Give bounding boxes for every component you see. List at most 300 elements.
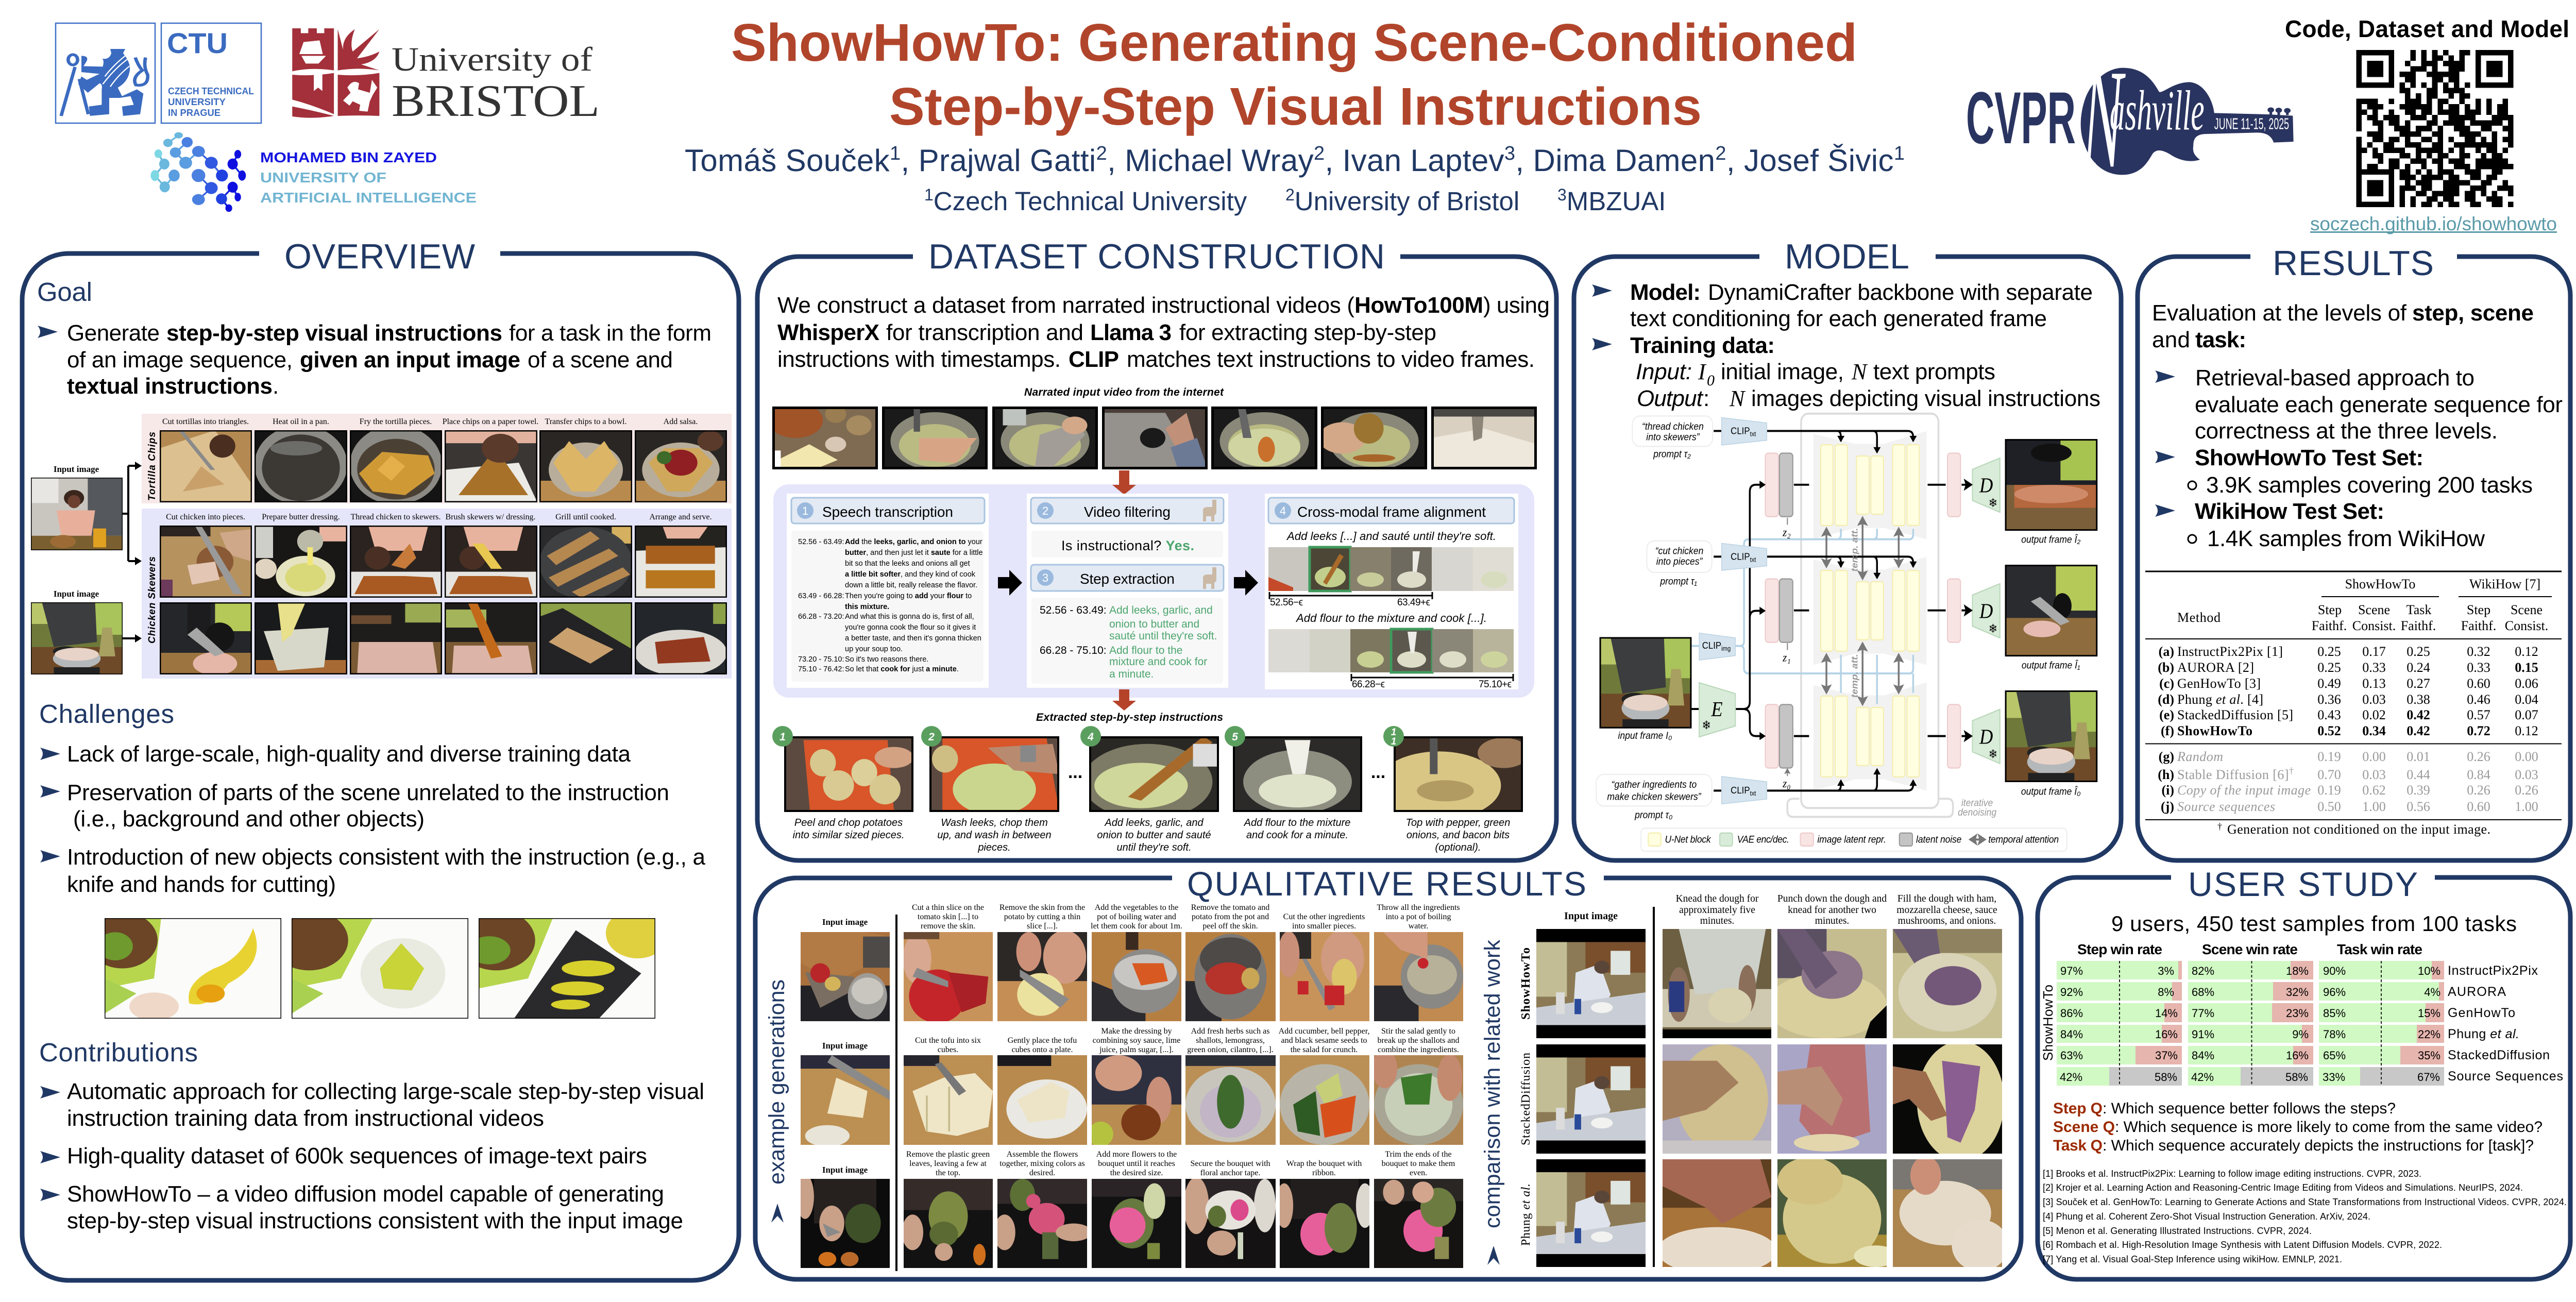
captions: example generations: Add the vegetables to the <box>1095 903 1178 912</box>
bar values: 84% <box>2192 1049 2214 1062</box>
table: results: (j) <box>2161 799 2174 814</box>
photo row: tomato and potato <box>801 931 1463 1023</box>
text block: contributions <box>40 1079 704 1233</box>
table: results: WikiHow [7] <box>2469 577 2540 591</box>
captions: example generations: leaves, leaving a few at <box>909 1159 987 1168</box>
captions: example generations <box>906 903 1460 1177</box>
captions: example generations: green onion, cilantro, [...]. <box>1187 1045 1274 1054</box>
step captions: pieces. <box>977 842 1011 853</box>
logo: Czech Technical University: UNIVERSITY <box>168 97 226 107</box>
photo row: flower bouquet <box>796 1174 1463 1268</box>
text block: results description: Retrieval-based approach to <box>2195 365 2475 391</box>
method labels: StackedDiffusion <box>1519 1053 1533 1145</box>
table: results: 0.49 <box>2317 676 2341 691</box>
step captions: onions, and bacon bits <box>1406 830 1510 841</box>
references: [3] Souček et al. GenHowTo: Learning to Generate Actions and State Transformations from Instructional Videos. CVPR, 2024. <box>2043 1197 2567 1207</box>
text block: results description: Evaluation at the levels of <box>2152 300 2407 326</box>
clip text encoders <box>1722 418 1767 804</box>
table: results: † <box>2217 821 2222 832</box>
table: results: 0.42 <box>2406 723 2430 738</box>
bar values: 92% <box>2060 986 2083 999</box>
text block: challenges: Lack of large-scale, high-quality and diverse training data <box>67 741 631 767</box>
table: results: 0.26 <box>2467 783 2490 798</box>
frame strip 1 <box>1268 547 1514 591</box>
step captions: into similar sized pieces. <box>793 830 904 841</box>
caption: narrated input video: Narrated input video from the internet <box>1024 386 1224 398</box>
text block: results description: 3.9K samples covering 200 tasks <box>2206 472 2533 498</box>
table: results: 0.12 <box>2515 644 2538 659</box>
table: results: 0.60 <box>2467 799 2490 814</box>
text block: dataset intro: ) using <box>1483 293 1550 318</box>
iterative denoising label <box>1958 797 1997 818</box>
gray temporal attention arrows <box>1826 518 1899 704</box>
u-net row 2: ❄ <box>1989 496 1997 510</box>
steps 2 and 3: filtering and extraction: Add leeks, garlic, and <box>1109 604 1213 616</box>
bar values: 96% <box>2323 986 2346 999</box>
panel: results <box>2138 244 2570 860</box>
authors: 2 <box>1314 143 1325 164</box>
step 1: speech transcription: down a little bit, really release the flavor. <box>845 581 977 589</box>
table: results: 0.43 <box>2317 707 2341 722</box>
latent noise labels: z₀ <box>1782 776 1791 790</box>
input image labels: Input image <box>822 1165 868 1175</box>
clip image encoder: img <box>1721 645 1731 652</box>
affiliations: MBZUAI <box>1567 187 1666 216</box>
captions: example generations: bouquet until it reaches <box>1098 1159 1175 1168</box>
steps 2 and 3: filtering and extraction: 3 <box>1042 571 1048 584</box>
chart titles: Scene win rate <box>2202 941 2298 957</box>
table: results: ShowHowTo <box>2177 723 2252 738</box>
text block: goal: Generate <box>67 320 160 346</box>
prompts: prompt τ₁ <box>1659 576 1697 587</box>
step 1: speech transcription: 63.49 - 66.28: <box>798 592 844 600</box>
text block: contributions: High-quality dataset of 600k sequences of image-text pairs <box>67 1143 647 1169</box>
bar values: 78% <box>2323 1028 2346 1041</box>
table: results: 0.70 <box>2317 767 2341 782</box>
legend: VAE enc/dec. <box>1737 834 1789 845</box>
arrow: down to pipeline <box>1112 470 1136 495</box>
video frames strip <box>768 403 1537 470</box>
text block: model description: text conditioning for each generated frame <box>1630 306 2047 331</box>
panel: model <box>1574 237 2121 860</box>
table: results: AURORA [2] <box>2177 660 2254 675</box>
bar values: 68% <box>2192 986 2214 999</box>
captions: example generations: the top. <box>936 1169 960 1177</box>
timeline 1 <box>1269 592 1432 608</box>
captions: example generations: remove the skin. <box>921 922 975 931</box>
logo: CVPR Nashville: CVPR <box>1966 77 2076 159</box>
subheading: goal: Goal <box>37 277 92 307</box>
captions: comparison: approximately five <box>1679 905 1755 916</box>
u-net row 0: ❄ <box>1989 748 1997 761</box>
step captions: Wash leeks, chop them <box>941 817 1048 828</box>
panel: overview <box>22 237 739 1280</box>
text block: goal: . <box>273 374 279 399</box>
step captions: Top with pepper, green <box>1406 817 1510 828</box>
table: results: 0.38 <box>2406 692 2430 707</box>
step 1: speech transcription <box>787 494 989 688</box>
captions: example generations: Secure the bouquet with <box>1190 1159 1270 1168</box>
bar values: 10% <box>2418 965 2441 977</box>
title: ShowHowTo: Generating Scene-Conditioned <box>731 13 1857 72</box>
icon: CTU lion <box>61 49 148 116</box>
table: results: Random <box>2177 749 2223 764</box>
captions: example generations: Remove the tomato and <box>1191 903 1269 912</box>
clip text encoders: CLIP <box>1731 426 1750 436</box>
step captions: up, and wash in between <box>937 830 1052 841</box>
text block: dataset intro: instructions with timestamps. <box>777 347 1061 372</box>
table: results: 0.27 <box>2406 676 2430 691</box>
logo: MBZUAI: ARTIFICIAL INTELLIGENCE <box>260 190 477 206</box>
step 1: speech transcription: you're gonna cook the flour so it gives it <box>845 623 976 632</box>
photo row: chicken skewers 1 <box>160 526 727 599</box>
step captions: Add flour to the mixture <box>1244 817 1350 828</box>
bar values: 22% <box>2418 1028 2441 1041</box>
text block: questions: Scene Q <box>2053 1119 2115 1136</box>
captions: example generations: let them cook for about 1m. <box>1091 922 1182 931</box>
text block: model description <box>1592 280 2100 411</box>
captions: comparison: Input image <box>1564 910 1618 922</box>
figure: overview example sequences: Tortilla Chips <box>147 432 158 501</box>
text block: dataset intro: Llama 3 <box>1090 320 1172 345</box>
table: results: InstructPix2Pix [1] <box>2177 644 2283 659</box>
captions: example generations: combine the ingredients. <box>1378 1045 1459 1054</box>
captions: example generations: even. <box>1410 1169 1427 1177</box>
table: results: 0.72 <box>2467 723 2490 738</box>
figure: overview example sequences: Input image <box>54 589 99 599</box>
table: results: Faithf. <box>2312 618 2347 633</box>
figure: overview example sequences: Thread chicken to skewers. <box>350 513 441 521</box>
side label: comparison with related work: comparison with related work <box>1480 940 1505 1228</box>
step 1: speech transcription: butter, and then just let it saute for a little <box>845 549 983 557</box>
step 4: cross-modal frame alignment: Add leeks [...] and sauté until they're soft. <box>1286 530 1496 543</box>
prompts: make chicken skewers” <box>1607 791 1701 802</box>
steps 2 and 3: filtering and extraction: 52.56 - 63.49: <box>1040 604 1107 616</box>
text block: model description: Input: <box>1636 359 1692 384</box>
heading: qualitative results: QUALITATIVE RESULTS <box>1187 865 1586 903</box>
affiliations: 2 <box>1285 185 1295 204</box>
authors: 1 <box>890 143 901 164</box>
text block: results description: task: <box>2195 327 2246 352</box>
table: results: 0.03 <box>2362 692 2386 707</box>
temporal attention labels: temp. att. <box>1849 654 1859 698</box>
clip text encoders: txt <box>1750 556 1756 564</box>
table: results: 0.03 <box>2515 767 2538 782</box>
timeline 2: 75.10+ϵ <box>1479 679 1512 690</box>
table: results: 0.19 <box>2317 749 2341 764</box>
input image labels: Input image <box>822 917 868 927</box>
icon: guitar: ashville <box>2110 79 2205 142</box>
text block: dataset intro: HowTo100M <box>1354 293 1483 318</box>
text block: model description: N <box>1729 386 1746 411</box>
table: results: 1.00 <box>2515 799 2538 814</box>
heading: dataset construction: DATASET CONSTRUCTION <box>928 237 1385 276</box>
table: results: 0.06 <box>2515 676 2538 691</box>
diagram: model architecture <box>1596 414 2097 851</box>
table: results: (f) <box>2161 723 2174 738</box>
subheading: contributions: Contributions <box>39 1038 198 1067</box>
authors: , Dima Damen <box>1515 143 1715 178</box>
references <box>2043 1169 2567 1264</box>
captions: example generations: together, mixing colors as <box>999 1159 1085 1168</box>
text block: model description: DynamiCrafter backbone with separate <box>1708 280 2093 305</box>
table: results: 0.25 <box>2317 644 2341 659</box>
text block: goal: textual instructions <box>67 374 273 399</box>
text block: questions: Task Q <box>2053 1137 2103 1154</box>
figure: overview example sequences: Add salsa. <box>664 417 698 426</box>
logo: MBZUAI: MOHAMED BIN ZAYED <box>260 149 437 165</box>
prompts: into skewers” <box>1646 431 1700 443</box>
clip text encoders: txt <box>1750 789 1756 797</box>
steps 2 and 3: filtering and extraction: sauté until they're soft. <box>1109 630 1217 642</box>
chart: win rates <box>2040 941 2563 1086</box>
timeline 2 <box>1351 674 1513 690</box>
heading: overview: OVERVIEW <box>284 237 475 276</box>
table: results: 0.25 <box>2317 660 2341 675</box>
legend: latent noise <box>1916 834 1961 845</box>
table: results: (a) <box>2159 644 2174 659</box>
legend: U-Net block <box>1665 834 1711 845</box>
photos: ShowHowTo row <box>1663 929 2002 1038</box>
table: results: 0.84 <box>2467 767 2490 782</box>
text block: results description: and <box>2152 327 2190 352</box>
clip text encoders: CLIP <box>1731 551 1750 562</box>
text block: challenges <box>40 741 706 897</box>
method names <box>2448 963 2563 1084</box>
logo: University of Bristol: BRISTOL <box>392 76 600 126</box>
captions: example generations: Add more flowers to the <box>1096 1150 1177 1159</box>
table: results: 0.07 <box>2515 707 2538 722</box>
bar values: 82% <box>2192 965 2214 977</box>
output frames <box>2005 439 2097 782</box>
text block: results description: WikiHow Test Set: <box>2195 499 2384 524</box>
latent noise labels <box>1782 518 1791 790</box>
figure: overview example sequences <box>31 414 732 679</box>
icon: MBZUAI molecule <box>150 132 246 212</box>
bar values <box>2060 965 2441 1084</box>
captions: example generations: potato by cutting a thin <box>1004 912 1080 921</box>
legend <box>1641 828 2067 851</box>
step 4: cross-modal frame alignment <box>1265 494 1518 690</box>
steps 2 and 3: filtering and extraction: 2 <box>1042 504 1048 517</box>
bar values: 33% <box>2323 1071 2345 1084</box>
steps 2 and 3: filtering and extraction: Add flour to the <box>1109 645 1182 656</box>
clip text encoders: txt <box>1750 430 1756 438</box>
bar values: 8% <box>2158 986 2174 999</box>
prompts: “gather ingredients to <box>1612 779 1697 790</box>
label: input frame: input frame I₀ <box>1618 730 1672 741</box>
chart titles: Step win rate <box>2077 941 2162 957</box>
table: results: 0.42 <box>2406 707 2430 722</box>
icon: Bristol shield <box>292 28 379 118</box>
table: results: Step <box>2318 602 2342 617</box>
authors: , Josef Šivic <box>1726 143 1893 178</box>
logo: University of Bristol: University of <box>392 41 592 78</box>
bar values: 85% <box>2323 1007 2346 1020</box>
table: results: 0.12 <box>2515 723 2538 738</box>
authors: , Ivan Laptev <box>1325 143 1504 178</box>
text block: model description: Model: <box>1630 280 1701 305</box>
text block: dataset intro: matches text instructions to video frames. <box>1127 347 1535 372</box>
table: results: Method <box>2177 610 2221 625</box>
u-net row 0 <box>1766 682 2000 790</box>
table: results: 1.00 <box>2362 799 2386 814</box>
table: results: 0.15 <box>2515 660 2538 675</box>
subheading: challenges: Challenges <box>39 699 174 729</box>
u-net row 2: D <box>1979 475 1993 497</box>
step 1: speech transcription: And what this is gonna do is, first of all, <box>845 613 974 621</box>
dividers <box>896 907 1654 1271</box>
photos: StackedDiffusion row <box>1663 1041 2004 1161</box>
method names: Source Sequences <box>2448 1069 2563 1084</box>
text block: model description: I <box>1698 359 1707 384</box>
step 4: cross-modal frame alignment: Add flour to the mixture and cook [...]. <box>1295 612 1487 624</box>
step 1: speech transcription: 73.20 - 75.10: <box>798 655 844 664</box>
figure: overview example sequences: Chicken Skewers <box>147 556 158 644</box>
method names: GenHowTo <box>2448 1006 2515 1020</box>
method labels: ShowHowTo <box>1519 948 1533 1020</box>
iterative denoising label: denoising <box>1958 806 1997 818</box>
ellipses between steps: ... <box>1371 763 1385 782</box>
photo row: chicken skewers 2 <box>160 602 727 676</box>
timeline 2: 66.28−ϵ <box>1352 679 1385 690</box>
table: results: 0.00 <box>2515 749 2538 764</box>
captions: example generations: Remove the plastic green <box>906 1150 990 1159</box>
title: Step-by-Step Visual Instructions <box>889 77 1702 136</box>
captions: example generations: tomato skin [...] to <box>918 912 978 921</box>
figure: overview example sequences: Brush skewers w/ dressing. <box>445 513 536 521</box>
photo row: tofu salad <box>801 1049 1463 1146</box>
step 1: speech transcription: 75.10 - 76.42: <box>798 665 844 673</box>
text block: dataset intro <box>777 293 1550 372</box>
logo: Czech Technical University <box>56 23 261 123</box>
output frame labels: output frame Î₁ <box>2022 660 2080 671</box>
table: results: 0.25 <box>2406 644 2430 659</box>
captions: example generations: the desired size. <box>1110 1169 1163 1177</box>
table: results: (b) <box>2158 660 2174 675</box>
step 4: cross-modal frame alignment: 4 <box>1280 504 1286 517</box>
figure: overview example sequences: Cut chicken into pieces. <box>166 513 245 521</box>
step captions: Add leeks, garlic, and <box>1104 817 1204 828</box>
captions: example generations: bouquet to make them <box>1382 1159 1455 1168</box>
photo: input woman <box>31 478 123 550</box>
panel: user study <box>2038 865 2570 1279</box>
figure: overview example sequences: Fry the tortilla pieces. <box>360 417 432 426</box>
captions: example generations: combining soy sauce, lime <box>1093 1036 1180 1045</box>
captions: comparison: Punch down the dough and <box>1777 893 1887 904</box>
captions: example generations: Add cucumber, bell pepper, <box>1279 1027 1369 1036</box>
table: results: 0.19 <box>2317 783 2341 798</box>
captions: example generations: cubes. <box>938 1045 958 1054</box>
bar values: 16% <box>2155 1028 2178 1041</box>
timeline 1: 63.49+ϵ <box>1397 597 1430 608</box>
step captions: Peel and chop potatoes <box>794 817 903 828</box>
table: results: † <box>2289 766 2294 776</box>
captions: comparison: Fill the dough with ham, <box>1897 893 1996 904</box>
bar values: 65% <box>2323 1049 2346 1062</box>
table: results: 0.57 <box>2467 707 2490 722</box>
QR code <box>2357 50 2513 207</box>
bar values: 15% <box>2418 1007 2441 1020</box>
iterative denoising label: iterative <box>1961 797 1993 808</box>
bar values: 32% <box>2286 986 2309 999</box>
bar values: 63% <box>2060 1049 2083 1062</box>
table: results: 0.26 <box>2515 783 2538 798</box>
text block: model description: text prompts <box>1873 359 1995 384</box>
step captions: until they're soft. <box>1117 842 1191 853</box>
text block: challenges: Preservation of parts of the scene unrelated to the instruction <box>67 780 669 805</box>
step 1: speech transcription: a little bit softer, and they kind of cook <box>845 570 976 579</box>
step number badges <box>772 726 1404 747</box>
text block: results description <box>2152 300 2563 551</box>
bar values: 86% <box>2060 1007 2083 1020</box>
bar values: 3% <box>2158 965 2174 977</box>
table: results: 0.26 <box>2467 749 2490 764</box>
text block: results description: ShowHowTo Test Set: <box>2195 445 2424 470</box>
captions: example generations: water. <box>1409 922 1428 931</box>
step 1: speech transcription: So it's two reasons there. <box>845 655 928 664</box>
photos: Phung et al row <box>1657 1156 2009 1275</box>
table: results: 0.33 <box>2467 660 2490 675</box>
input frame <box>1599 637 1692 729</box>
text block: model description: images depicting visual instructions <box>1751 386 2100 411</box>
arrow: step 1 to 2 <box>998 570 1022 596</box>
table: results: 0.01 <box>2406 749 2430 764</box>
prompts: prompt τ₂ <box>1653 448 1691 460</box>
u-net row 0: D <box>1979 726 1993 749</box>
table: results: 0.36 <box>2317 692 2341 707</box>
output frame labels <box>2021 534 2081 797</box>
text block: goal <box>38 320 711 399</box>
captions: example generations: potato from the pot and <box>1192 912 1269 921</box>
step 1: speech transcription: Then you're going to add your flour to <box>845 592 972 600</box>
captions: example generations: Add fresh herbs such as <box>1191 1027 1269 1036</box>
steps 2 and 3: filtering and extraction <box>1027 494 1228 688</box>
table: results: 0.03 <box>2362 767 2386 782</box>
figure: overview example sequences: Arrange and serve. <box>649 513 712 521</box>
step captions: and cook for a minute. <box>1246 830 1348 841</box>
captions: example generations: break up the shallots and <box>1377 1036 1460 1045</box>
text block: model description: Training data: <box>1630 333 1775 358</box>
affiliations: Czech Technical University <box>934 187 1247 216</box>
captions: example generations: the salad for crunch. <box>1291 1045 1358 1054</box>
step number badges: 1 <box>1391 727 1396 738</box>
text block: model description: N <box>1851 359 1868 384</box>
captions: example generations: Assemble the flowers <box>1007 1150 1078 1159</box>
temporal attention labels: temp. att. <box>1849 528 1859 571</box>
figure: overview example sequences: Input image <box>54 464 99 474</box>
steps 2 and 3: filtering and extraction: a minute. <box>1109 668 1154 680</box>
legend: image latent repr. <box>1818 834 1886 845</box>
captions: comparison: Knead the dough for <box>1676 893 1759 904</box>
text block: contributions: step-by-step visual instructions consistent with the input image <box>67 1208 683 1233</box>
affiliations <box>924 185 1666 216</box>
table: results: Generation not conditioned on the input image. <box>2227 822 2490 837</box>
text block: goal: of an image sequence, <box>67 347 293 373</box>
method labels: Phung et al. <box>1519 1183 1533 1246</box>
table: results: 0.46 <box>2467 692 2490 707</box>
table: results: Scene <box>2358 602 2390 617</box>
figure: avocado examples <box>87 908 669 1021</box>
vae encoder: E <box>1710 698 1723 721</box>
table: results: 0.44 <box>2406 767 2430 782</box>
text block: dataset intro: for transcription and <box>886 320 1083 345</box>
bar values: 14% <box>2155 1007 2178 1020</box>
prompts: prompt τ₀ <box>1634 809 1673 820</box>
photos: input kitchen <box>1536 929 1646 1267</box>
text block: model description: 0 <box>1707 372 1715 389</box>
chart titles: Task win rate <box>2337 941 2422 957</box>
